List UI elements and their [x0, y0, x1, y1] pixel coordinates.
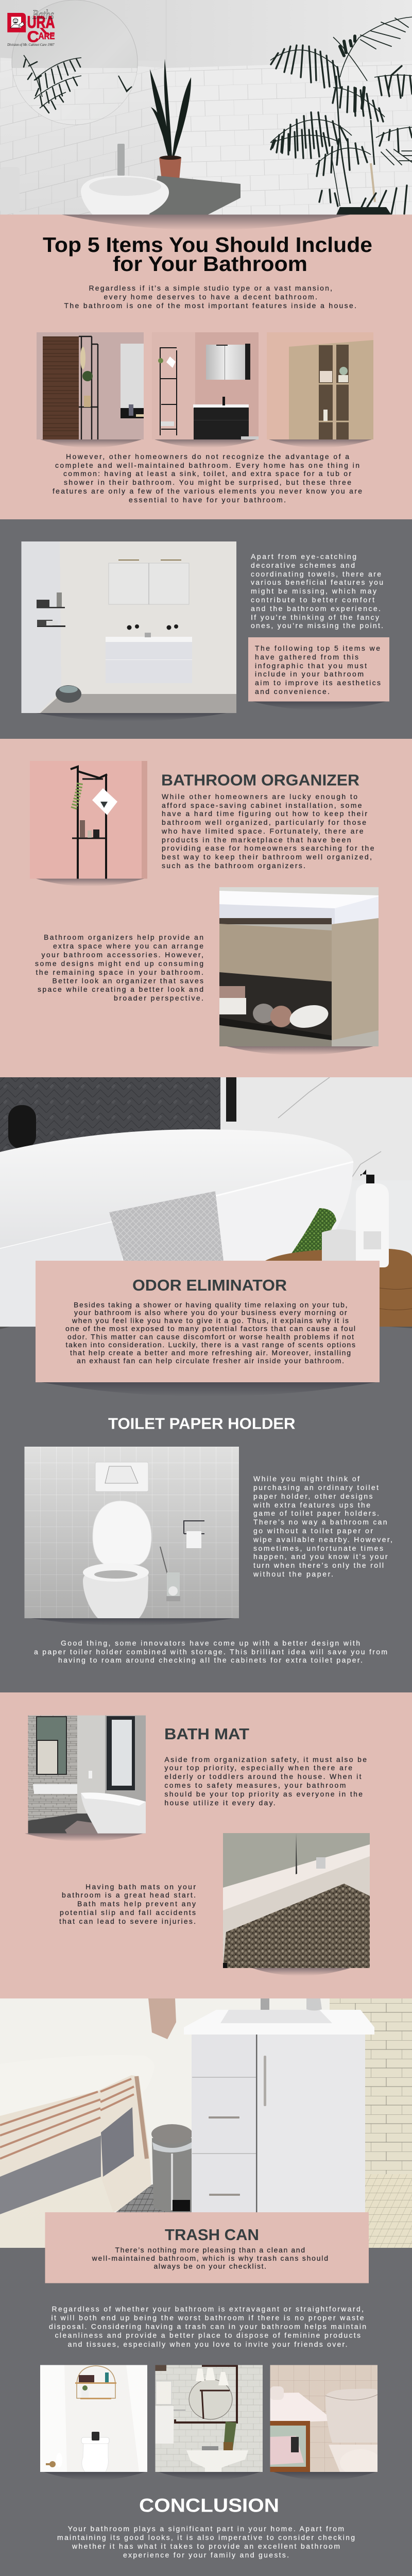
photo: dark wood cabinet with ladder shelf: [37, 332, 144, 448]
text: safety: house utilize it every day.: [164, 1799, 276, 1807]
panel: beneficial features (grey): [0, 519, 412, 739]
photo panel: vanity, tub and trash can: [0, 1998, 412, 2248]
text: conclusion: maintaining its good looks, it is also imperative to consider checking: [57, 2533, 355, 2541]
text: bath mats help: Having bath mats on your: [85, 1883, 196, 1891]
text: better design with storage: [34, 1639, 387, 1664]
text: organizer description: have a hard time figuring out how to keep their: [162, 809, 367, 818]
photo: oak storage cabinet: [267, 332, 373, 448]
callout: top 5 items: have gathered from this: [255, 653, 358, 661]
white vanity: [184, 1998, 374, 2248]
text: toilet paper holder description: wipe available nearby. However,: [253, 1535, 392, 1544]
text: waste disposal: cleanliness and provide a better place to dispose of feminine products: [55, 2331, 360, 2339]
text: toilet paper holder description: without the paper.: [253, 1570, 333, 1578]
text: organizer benefit: some designs might end up consuming: [35, 959, 203, 968]
callout: top 5 items: infographic that you must: [255, 662, 367, 670]
text: advantage of a complete bathroom: [53, 452, 362, 504]
text: odor eliminator description: [65, 1300, 355, 1365]
snake plant in terracotta pot: [150, 59, 191, 183]
text: advantage of a complete bathroom: However, other homeowners do not recognize the advantage of a: [66, 452, 349, 461]
text: eye-catching decorative schemes: [251, 552, 383, 630]
title: [43, 233, 372, 276]
text: odor eliminator description: one of the most exposed to many potential factors that can cause a foul: [65, 1324, 355, 1332]
panel: toilet paper holder (grey): [0, 1261, 412, 1692]
text: waste disposal: Regardless of whether your bathroom is extravagant or straightforward,: [52, 2305, 364, 2313]
text: organizer benefit: space while creating a better look and: [38, 985, 203, 993]
text: trash can intro: There’s nothing more pleasing than a clean and: [115, 2246, 305, 2254]
text: safety: elderly or toddlers around the house. When it: [164, 1772, 362, 1781]
panel: bathroom organizer (pink): [0, 739, 412, 1077]
text: toilet paper holder description: with extra features ups the: [253, 1501, 370, 1509]
text: better design with storage: Good thing, some innovators have come up with a better design with: [61, 1639, 360, 1647]
text: bath mats help: Bath mats help prevent any: [77, 1900, 196, 1908]
text: bath mats help: [59, 1883, 196, 1925]
callout: top 5 items: include in your bathroom: [255, 670, 364, 678]
photo: wall-hung toilet: [25, 1447, 239, 1626]
photo panel: freestanding tub: [0, 1077, 412, 1327]
photo: white double vanity: [22, 541, 237, 721]
text: toilet paper holder description: go without a toilet paper or: [253, 1527, 373, 1535]
text: odor eliminator description: your bathroom is also where you do your business every morning or: [74, 1309, 347, 1317]
text: organizer benefit: the remaining space in your bathroom.: [36, 968, 203, 976]
text: conclusion: Your bathroom plays a significant part in your home. Apart from: [68, 2524, 344, 2533]
panel: bath mat (pink): [0, 1692, 412, 1998]
photo: toilet next to wood vanity: [270, 2365, 381, 2480]
towel: [109, 1191, 224, 1261]
text: organizer description: [161, 792, 374, 870]
text: organizer description: While other homeowners are lucky enough to: [162, 792, 357, 801]
text: advantage of a complete bathroom: shower in their bathroom. You might be surprised, but these three: [64, 478, 351, 486]
vessel sink: [81, 176, 169, 215]
text: conclusion: experience for your family and guests.: [123, 2551, 289, 2559]
callout: top 5 items: aim to improve its aesthetics: [255, 679, 381, 687]
photo: black vanity with mirror cabinet: [152, 332, 259, 448]
text: eye-catching decorative schemes: various beneficial features you: [251, 578, 383, 586]
heading: BATH MAT: [164, 1725, 249, 1743]
text: bath mats help: bathroom is a great head start.: [62, 1891, 196, 1899]
text: eye-catching decorative schemes: coordinating towels, there are: [251, 570, 381, 578]
photo: shaggy bath mat by shower: [223, 1833, 370, 1976]
text: trash can intro: [92, 2246, 328, 2270]
photo: bathroom with freestanding tub: [25, 1715, 146, 1841]
heading: conclusion: CONCLUSION: [139, 2495, 279, 2516]
text: conclusion: whether it has what it takes to provide an excellent bathroom: [72, 2542, 340, 2550]
intro text: The bathroom is one of the most important features inside a house.: [64, 301, 356, 310]
title: Top 5 Items You Should Include: [43, 233, 372, 257]
text: better design with storage: having to roam around checking all the cabinets for extra toilet paper.: [58, 1656, 363, 1664]
text: safety: your top priority, especially when there are: [164, 1764, 352, 1772]
text: organizer benefit: Bathroom organizers help provide an: [44, 933, 203, 941]
text: safety: should be your top priority as everyone in the: [164, 1790, 363, 1798]
text: advantage of a complete bathroom: complete and well-maintained bathroom. Every home has one thing in: [55, 461, 359, 469]
text: odor eliminator description: an exhaust fan can help circulate fresher air inside your bathroom.: [77, 1357, 344, 1365]
text: eye-catching decorative schemes: might be missing, which may: [251, 587, 376, 595]
text: better design with storage: a paper toiler holder combined with storage. This brilliant idea will save you from: [34, 1648, 387, 1656]
logo: Baths Dura Care (header): Division of Mr. Cabinet Care 1987: [7, 43, 55, 47]
text: toilet paper holder description: game of toilet paper holders.: [253, 1509, 379, 1517]
callout: top 5 items: [248, 637, 389, 710]
text: eye-catching decorative schemes: If you’re thinking of the fancy: [251, 613, 379, 621]
logo: Baths Dura Care (header): C: [27, 28, 39, 45]
text: organizer description: products in the marketplace that have been: [162, 836, 351, 844]
logo: Baths Dura Care (header): ARE: [39, 30, 55, 41]
photo: oak vanity with towels: [219, 887, 379, 1055]
text: organizer benefit: Better look an organizer that saves: [53, 977, 203, 985]
text: organizer benefit: broader perspective.: [114, 994, 203, 1002]
photo: white toilet with round shelf: [40, 2365, 147, 2480]
text: waste disposal: and tissues, especially when you love to invite your friends over.: [68, 2340, 348, 2348]
text: safety: [164, 1755, 367, 1807]
wood stool: [265, 1248, 412, 1327]
text: safety: Aside from organization safety, it must also be: [164, 1755, 367, 1764]
text: trash can intro: always be on your checklist.: [153, 2262, 266, 2270]
text: toilet paper holder description: [253, 1475, 392, 1578]
text: eye-catching decorative schemes: decorative schemes and: [251, 561, 355, 569]
faucet: [117, 144, 125, 176]
text: organizer description: who have limited space. Fortunately, there are: [161, 827, 364, 835]
text: eye-catching decorative schemes: contribute to better comfort: [251, 596, 374, 604]
logo: Baths Dura Care (header): [7, 7, 55, 47]
small hanging towel: [148, 1998, 176, 2039]
title: for Your Bathroom: [113, 252, 307, 276]
logo: Baths Dura Care (header): Baths: [32, 7, 54, 22]
text: conclusion: [57, 2524, 355, 2559]
text: organizer description: best way to keep their bathroom well organized,: [162, 853, 372, 861]
text: organizer description: afford space-saving cabinet installation, some: [162, 801, 362, 809]
text: odor eliminator description: taken into consideration. Luckily, there is a vast range of scents options: [66, 1341, 355, 1349]
text: toilet paper holder description: paper holder, other designs: [253, 1492, 373, 1500]
intro text: Regardless if it’s a simple studio type or a vast mansion,: [89, 284, 332, 292]
text: organizer description: such as the bathroom organizers.: [162, 861, 305, 870]
heading: BATHROOM ORGANIZER: [161, 771, 359, 789]
card: trash can: [45, 2212, 369, 2283]
text: organizer benefit: your bathroom accessories. However,: [41, 951, 203, 959]
text: organizer benefit: [35, 933, 203, 1002]
text: eye-catching decorative schemes: ones, you’re missing the point.: [251, 621, 383, 630]
callout: top 5 items: and convenience.: [255, 687, 330, 696]
panel: intro (pink): [0, 214, 412, 519]
text: advantage of a complete bathroom: common: having at least a sink, toilet, and extra space for a tub or: [63, 469, 351, 478]
text: toilet paper holder description: happen, and you know it’s your: [253, 1552, 388, 1561]
dark floor tile: [116, 2184, 196, 2212]
text: toilet paper holder description: There’s no way a bathroom can: [253, 1518, 387, 1526]
text: organizer benefit: extra space where you can arrange: [53, 942, 203, 950]
text: organizer description: bathroom well organized, particularly for those: [162, 818, 366, 826]
panel: trash can and conclusion (grey): [0, 2212, 412, 2576]
text: waste disposal: disposal. Considering having a trash can in your bathroom helps maintain: [49, 2323, 366, 2331]
text: odor eliminator description: odor. This matter can cause discomfort or worse health problems if not: [67, 1332, 354, 1341]
text: odor eliminator description: Besides taking a shower or having quality time relaxing on your tub,: [74, 1300, 348, 1309]
text: advantage of a complete bathroom: features are only a few of the various elements you never know you are: [53, 487, 362, 495]
heading: TOILET PAPER HOLDER: [108, 1415, 296, 1432]
card: odor eliminator: [36, 1261, 380, 1396]
text: waste disposal: it will both end up being the worst bathroom if there is no proper waste: [52, 2313, 364, 2321]
logo: Baths Dura Care (header): URA: [27, 13, 55, 31]
intro text: [64, 284, 356, 310]
text: toilet paper holder description: sometimes, unfortunate times: [253, 1544, 383, 1552]
text: trash can intro: well-maintained bathroom, which is why trash cans should: [92, 2254, 328, 2262]
text: odor eliminator description: when you feel like you have to give it a go. Thus, it explains why it is: [72, 1316, 349, 1325]
palm plant: [270, 17, 412, 215]
trash can: [151, 2124, 193, 2213]
callout: top 5 items: The following top 5 items we: [255, 644, 380, 652]
heading: TRASH CAN: [165, 2226, 259, 2244]
text: toilet paper holder description: While you might think of: [253, 1475, 359, 1483]
text: organizer description: providing ease for homeowners searching for the: [162, 844, 374, 852]
text: bath mats help: potential slip and fall accidents: [60, 1908, 196, 1917]
concrete counter: [149, 176, 241, 215]
text: toilet paper holder description: turn when there’s only the roll: [253, 1561, 384, 1569]
plant: [286, 1208, 336, 1261]
text: toilet paper holder description: purchasing an ordinary toilet: [253, 1483, 379, 1492]
intro text: every home deserves to have a decent bathroom.: [104, 293, 317, 301]
text: eye-catching decorative schemes: and the bathroom experience.: [251, 604, 381, 613]
bathtub with striped throw: [0, 2055, 154, 2248]
text: bath mats help: that can lead to severe injuries.: [59, 1917, 196, 1925]
round mirror: [10, 0, 139, 126]
photo: mirror above pedestal sink: [155, 2365, 263, 2480]
text: eye-catching decorative schemes: Apart from eye-catching: [251, 552, 356, 561]
text: advantage of a complete bathroom: essential to have for your bathroom.: [129, 496, 286, 504]
panel: hero bathroom photo: [0, 0, 412, 214]
photo: black ladder organizer on pink wall: [30, 761, 147, 886]
lotion bottle: [356, 1170, 389, 1267]
text: odor eliminator description: that help create a better and more refreshing air. Moreover, installing: [70, 1349, 351, 1357]
marble candle: [322, 1229, 360, 1261]
heading: ODOR ELIMINATOR: [132, 1276, 287, 1294]
text: safety: comes to safety measures, your bathroom: [164, 1781, 346, 1789]
text: waste disposal: [49, 2305, 366, 2348]
soap dispenser: [0, 167, 20, 213]
